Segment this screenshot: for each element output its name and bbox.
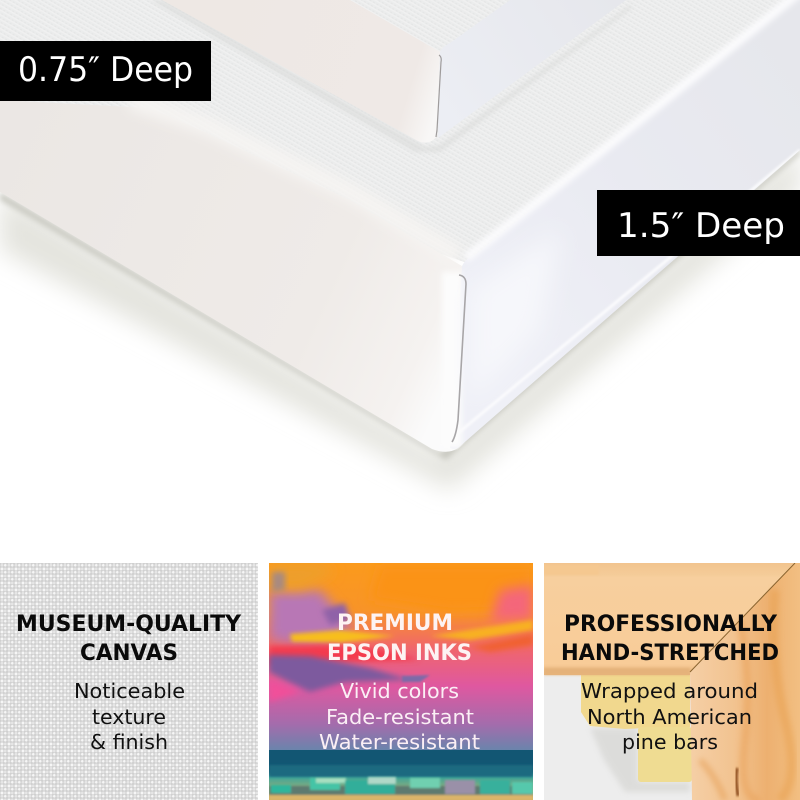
- label: 0.75 inch deep: 0.75″ Deep: [18, 50, 193, 90]
- body text: texture and finish: & finish: [90, 730, 168, 754]
- vertical wood bar: [690, 563, 800, 800]
- body text: ink qualities: Vivid colors: [340, 679, 459, 703]
- small canvas side face: [162, 0, 440, 143]
- large canvas top face: [0, 0, 800, 263]
- body text: ink qualities: [319, 679, 480, 754]
- panel: museum-quality canvas: [0, 563, 258, 800]
- exposed white canvas: [544, 675, 694, 800]
- linen texture: [0, 563, 258, 800]
- large canvas right face: [450, 0, 800, 449]
- label: 0.75 inch deep: [0, 41, 211, 101]
- panel: professionally hand-stretched: [544, 563, 800, 800]
- body text: ink qualities: Water-resistant: [319, 730, 480, 754]
- label: 1.5 inch deep: 1.5″ Deep: [617, 206, 785, 246]
- small canvas shadow: [150, 0, 632, 152]
- heading: museum-quality canvas: [16, 612, 242, 666]
- small canvas right face: [438, 0, 626, 138]
- body text: texture and finish: texture: [92, 705, 166, 729]
- body text: pine bars: Wrapped around: [581, 679, 758, 703]
- large canvas edge highlights: [130, 0, 800, 448]
- heading: premium epson inks: EPSON INKS: [327, 641, 472, 666]
- large canvas 1.5 inch: [0, 0, 800, 452]
- cast shadow of tabs: [590, 728, 690, 792]
- photo: pine stretcher bars: [544, 563, 800, 800]
- heading: premium epson inks: [327, 611, 472, 666]
- mitre seam: [690, 563, 795, 672]
- body text: texture and finish: Noticeable: [74, 679, 185, 703]
- heading: museum-quality canvas: CANVAS: [80, 641, 178, 666]
- horizontal wood bar: [544, 563, 800, 675]
- panel: premium epson inks: [269, 563, 533, 800]
- heading: museum-quality canvas: MUSEUM-QUALITY: [16, 612, 242, 637]
- small canvas top face: [350, 0, 510, 50]
- label: 1.5 inch deep: [597, 190, 800, 256]
- large canvas side face: [0, 100, 462, 452]
- body text: texture and finish: [74, 679, 185, 754]
- small canvas 0.75 inch: [162, 0, 626, 143]
- heading: professionally hand-stretched: PROFESSIONALLY: [564, 612, 778, 637]
- heading: professionally hand-stretched: HAND-STRETCHED: [561, 641, 779, 666]
- large canvas corner fold: [452, 275, 466, 442]
- painting: colourful sunset: [269, 563, 533, 800]
- canvas photo: stacked canvases: [0, 0, 800, 490]
- body text: pine bars: [581, 679, 758, 754]
- small canvas corner fold: [436, 55, 441, 137]
- body text: pine bars: pine bars: [622, 730, 718, 754]
- body text: ink qualities: Fade-resistant: [326, 705, 474, 729]
- heading: professionally hand-stretched: [561, 612, 779, 666]
- heading: premium epson inks: PREMIUM: [337, 611, 453, 636]
- yellow corner tabs: [581, 675, 690, 729]
- body text: pine bars: North American: [587, 705, 752, 729]
- cast shadow under large canvas: [0, 148, 800, 490]
